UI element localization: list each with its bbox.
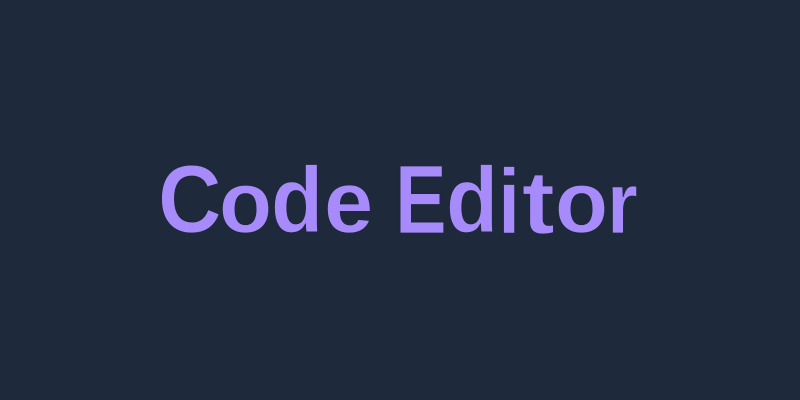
title: t [522,153,554,253]
title: C [158,146,222,253]
title: o [219,154,272,252]
title: i [498,150,520,253]
title: e [324,154,373,252]
title [158,146,638,255]
title: E [395,146,447,255]
title: d [271,149,323,253]
title: d [446,149,498,253]
title: o [555,154,608,252]
title: r [607,155,638,252]
